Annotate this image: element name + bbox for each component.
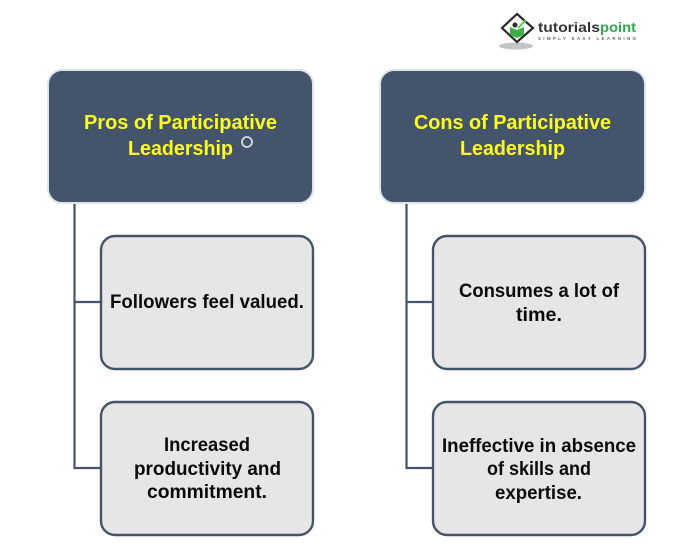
panel: increased productivity: productivity and [134, 459, 281, 480]
panel: cons heading [380, 70, 645, 203]
panel: ineffective without skills [433, 402, 645, 535]
icon: cursor circle [242, 137, 252, 147]
panel: cons heading: Cons of Participative [414, 112, 611, 134]
connector: cons tree [406, 203, 433, 468]
panel: pros heading: Leadership [128, 138, 233, 160]
panel: consumes time [433, 236, 645, 369]
panel: increased productivity [101, 402, 313, 535]
logo: tutorialspoint: SIMPLY EASY LEARNING [538, 36, 636, 41]
panel: pros heading [48, 70, 313, 203]
panel: ineffective without skills: expertise. [495, 483, 582, 504]
connector: pros tree [74, 203, 101, 468]
panel: pros heading: Pros of Participative [84, 112, 277, 134]
panel: ineffective without skills: of skills and [487, 459, 591, 480]
logo: tutorialspoint [499, 14, 637, 50]
panel: consumes time: time. [516, 305, 562, 326]
panel: increased productivity: commitment. [147, 482, 267, 503]
panel: cons heading: Leadership [460, 138, 565, 160]
panel: increased productivity: Increased [164, 435, 250, 456]
panel: ineffective without skills: Ineffective in absence [442, 436, 636, 457]
logo: tutorialspoint: tutorials [538, 20, 600, 35]
panel: followers feel valued: Followers feel valued. [110, 292, 304, 313]
panel: consumes time: Consumes a lot of [459, 281, 620, 302]
logo: tutorialspoint: point [600, 20, 637, 35]
panel: followers feel valued [101, 236, 313, 369]
